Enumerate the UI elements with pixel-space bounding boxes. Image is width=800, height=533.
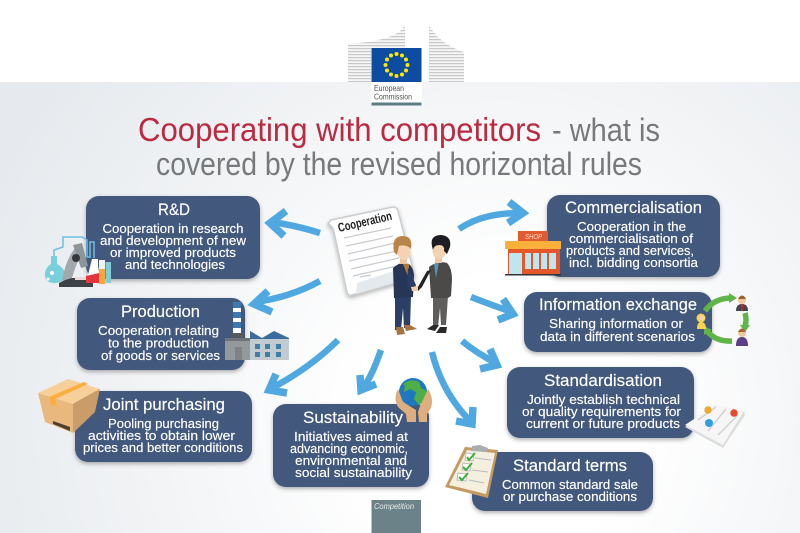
text: Production description: of goods or services (101, 348, 221, 363)
text: Information exchange description (540, 316, 696, 344)
arrow: to Sustainability (360, 350, 381, 390)
text: Production description: Cooperation relating (98, 323, 219, 338)
text: R&D description (100, 221, 247, 272)
text: Standard terms description: Common standard sale (502, 477, 638, 492)
icon: cardboard box (38, 379, 100, 433)
arrow: to R&D (270, 211, 320, 236)
logo text: European (374, 83, 404, 93)
text: Information exchange description: data in different scenarios (540, 329, 696, 344)
left man (393, 236, 419, 335)
text: Joint purchasing description: prices and better conditions (83, 440, 244, 455)
arrow: to Information exchange (471, 297, 513, 320)
title: covered by the revised horizontal rules (156, 146, 642, 182)
panel: Production (77, 298, 245, 370)
icon: laboratory equipment (45, 237, 111, 287)
icon: globe in hands (396, 378, 432, 422)
text: Production description (98, 323, 221, 363)
logo text: Commission (374, 92, 412, 102)
logo building wings (348, 25, 464, 82)
text: Sustainability description: Initiatives aimed at (294, 429, 408, 444)
title: Cooperating with competitors (138, 111, 541, 148)
heading: Commercialisation: Commercialisation (565, 198, 702, 217)
person top (736, 296, 748, 311)
panel: Sustainability (273, 404, 429, 487)
heading: Standardisation: Standardisation (544, 371, 662, 390)
icon: cooperation document (328, 207, 415, 295)
text: Joint purchasing description (83, 416, 244, 455)
icon: shop: SHOP (525, 232, 542, 241)
text: Sustainability description (290, 429, 413, 480)
text: Commercialisation description: commercialisation of (569, 231, 693, 246)
text: Sustainability description: environmental and (295, 453, 407, 468)
heading: Sustainability: Sustainability (303, 408, 403, 427)
footer: Competition tab: Competition (374, 502, 415, 511)
panel: Commercialisation (547, 195, 720, 277)
icon: factory (225, 302, 289, 360)
icon: slider controls (685, 405, 745, 448)
text: Joint purchasing description: Pooling purchasing (108, 416, 219, 431)
text: Commercialisation description: products and services, (566, 243, 694, 258)
arrow: to Standardisation (462, 341, 497, 369)
text: Standardisation description: Jointly establish technical (527, 392, 680, 407)
heading: Production: Production (121, 302, 200, 321)
arrow: to Commercialisation (459, 202, 523, 229)
panel: Joint purchasing (75, 391, 252, 462)
document heading: Cooperation (337, 209, 393, 235)
text: R&D description: and development of new (100, 233, 247, 248)
person bottom (736, 328, 748, 346)
arrow: to Standard terms (432, 352, 473, 424)
arrow: to Production (254, 281, 320, 312)
text: Standard terms description: or purchase conditions (503, 489, 637, 504)
text: Standardisation description: or quality requirements for (522, 404, 682, 419)
heading: Information exchange: Information exchange (539, 295, 697, 314)
icon: clipboard checklist (445, 445, 498, 498)
text: R&D description: and technologies (125, 257, 225, 272)
EU flag (372, 48, 422, 82)
heading: Joint purchasing: Joint purchasing (103, 395, 225, 414)
icon: shop (505, 231, 561, 276)
text: Standardisation description (522, 392, 682, 431)
text: Sustainability description: social sustainability (295, 465, 413, 480)
icon: people exchange cycle (696, 293, 750, 346)
text: Information exchange description: Sharing information or (549, 316, 684, 331)
text: Joint purchasing description: activities to obtain lower (88, 428, 236, 443)
text: Commercialisation description: incl. bidding consortia (569, 255, 699, 270)
logo: European Commission (348, 25, 464, 106)
text: Standard terms description (502, 477, 638, 504)
footer: Competition tab (372, 500, 421, 533)
text: Commercialisation description (566, 219, 699, 270)
icon: two businessmen shaking hands (393, 235, 452, 335)
panel: Standard terms (472, 452, 653, 511)
panel: Information exchange (524, 292, 712, 352)
title: - what is (552, 112, 660, 148)
title (138, 111, 660, 182)
panel: R&D (86, 196, 260, 279)
text: Commercialisation description: Cooperation in the (577, 219, 686, 234)
panel: Standardisation (507, 367, 694, 438)
person left (696, 314, 706, 329)
text: R&D description: Cooperation in research (102, 221, 243, 236)
arrow: to Joint purchasing (269, 340, 338, 393)
text: Standardisation description: current or future products (526, 416, 681, 431)
text: Production description: to the production (108, 336, 209, 350)
right man (418, 235, 452, 333)
logo text (374, 83, 412, 102)
text: Sustainability description: advancing economic, (290, 441, 408, 456)
heading: R&D: R&D (158, 200, 190, 219)
heading: Standard terms: Standard terms (513, 456, 627, 475)
text: R&D description: or improved products (110, 245, 237, 260)
